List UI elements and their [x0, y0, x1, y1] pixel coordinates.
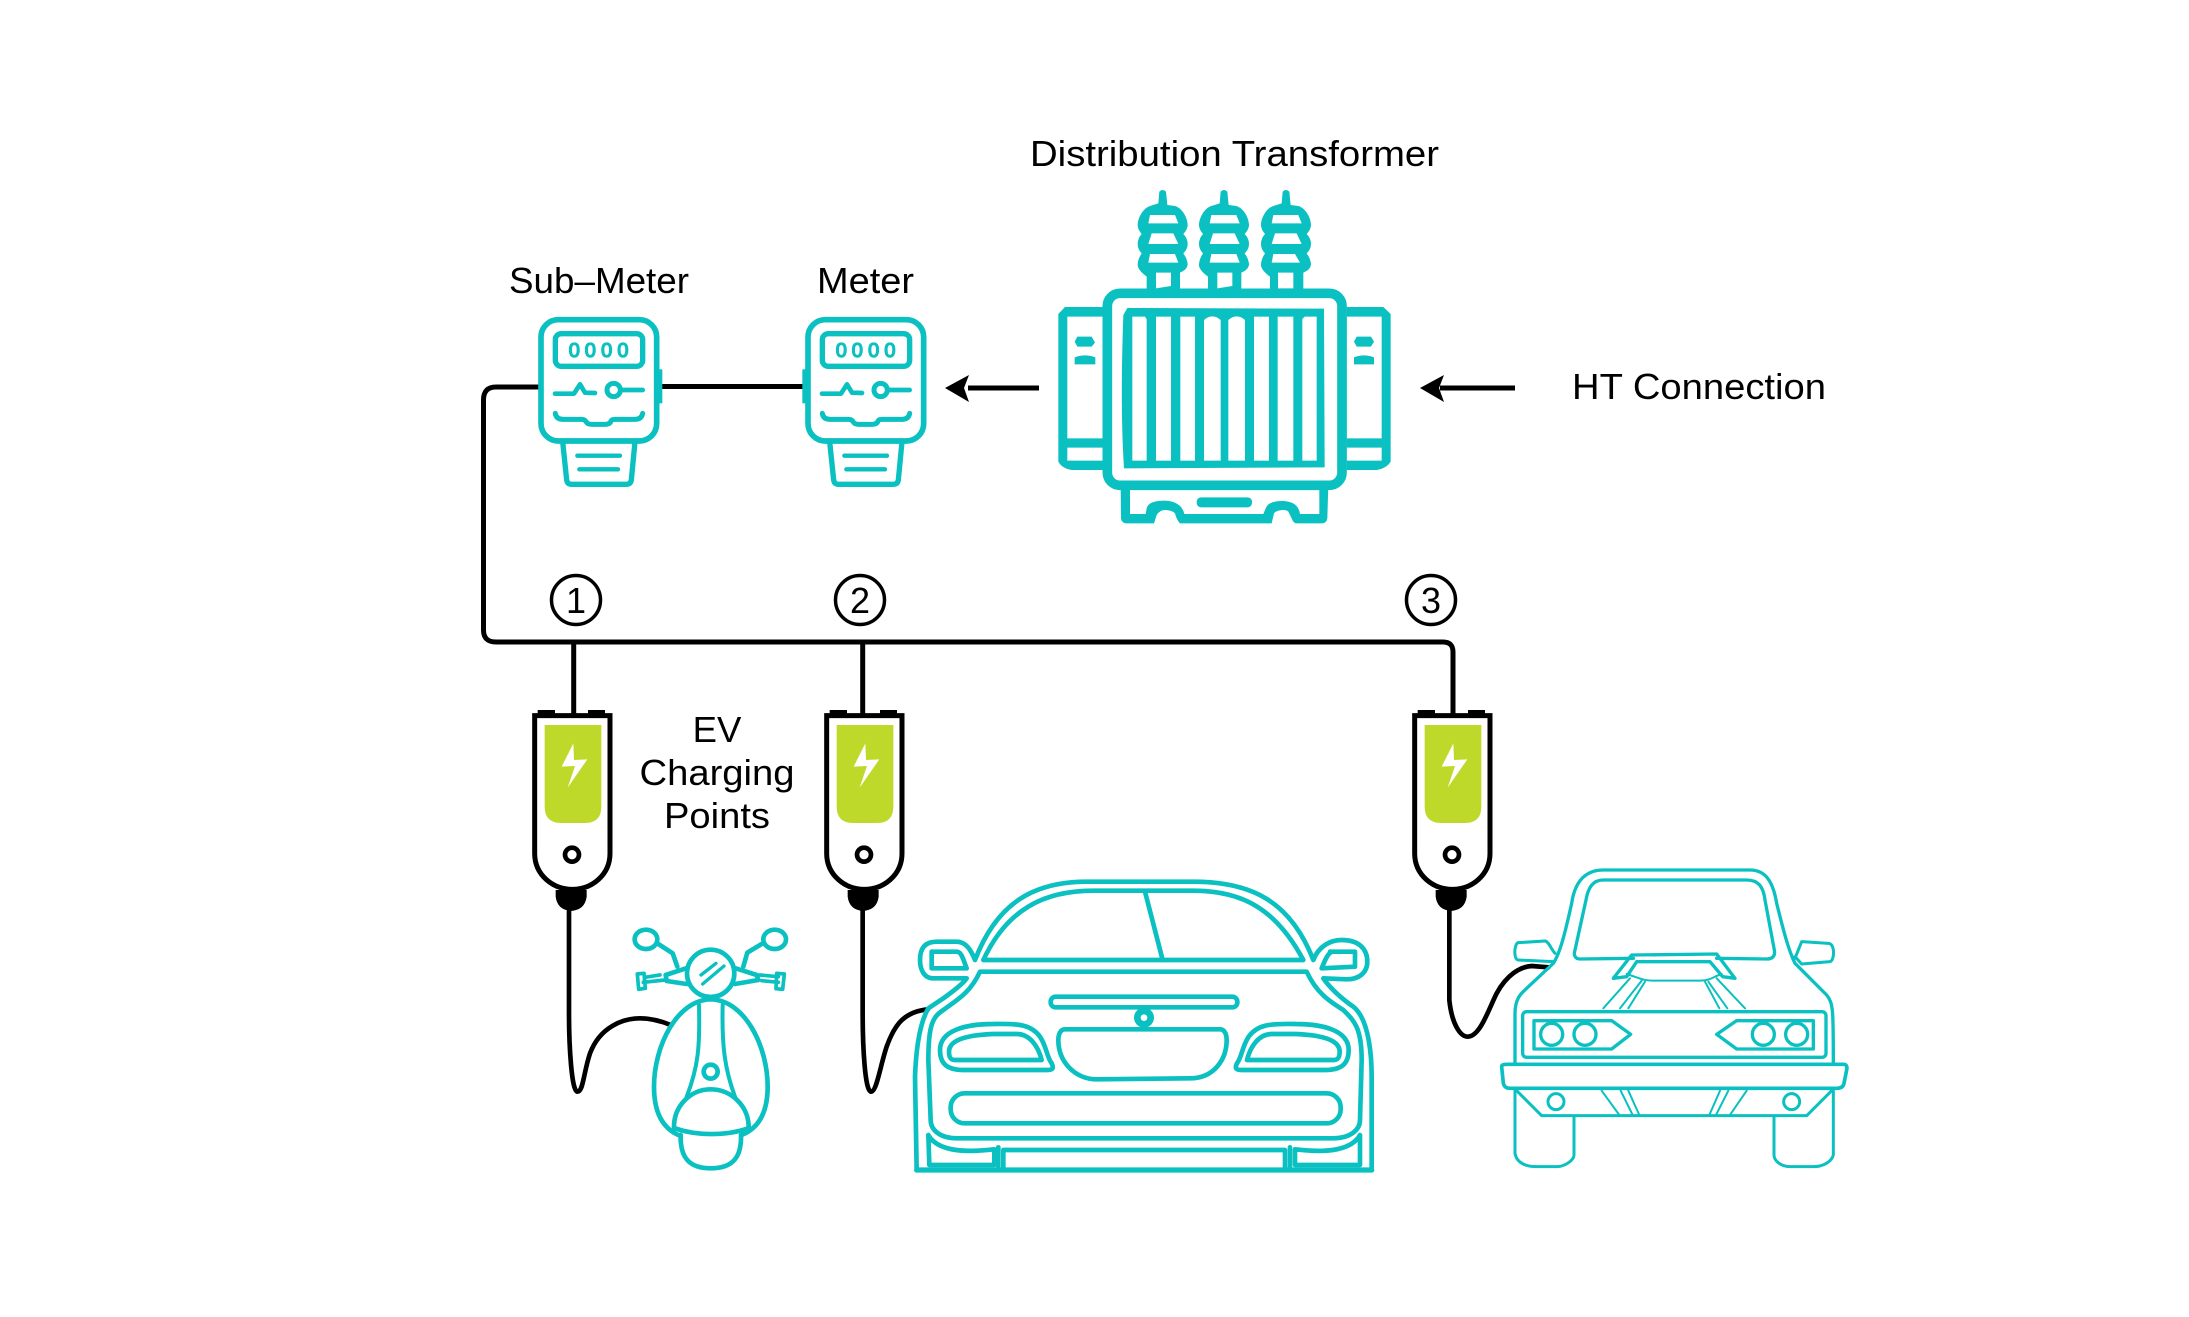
grille: [1058, 1029, 1227, 1079]
bumper: [1502, 1064, 1847, 1088]
wheels: [1515, 1090, 1574, 1167]
lightning bolt: [854, 743, 879, 788]
charging cable 2: [863, 911, 928, 1092]
windshield: [1574, 880, 1775, 959]
number badge 1: 1: [566, 580, 586, 621]
arrow: transformer to meter: [945, 375, 1039, 402]
icon: sedan car: [915, 882, 1372, 1170]
left headlight: [940, 1024, 1053, 1070]
icon: meter: [802, 320, 924, 484]
icon: distribution transformer: [1058, 190, 1391, 523]
windshield: [983, 891, 1303, 960]
car body outline: [915, 882, 1372, 1170]
charger 1: [535, 710, 610, 911]
battery level: [545, 725, 601, 823]
bottom trim: [928, 1135, 1360, 1165]
base: [1121, 485, 1328, 523]
mirrors: [1515, 941, 1555, 962]
rear light panel: [1523, 1012, 1826, 1057]
lightning bolt: [1442, 743, 1467, 788]
charging cable 3: [1449, 910, 1548, 1037]
right headlight: [1236, 1024, 1349, 1070]
heading: Distribution Transformer: Distribution Transformer: [1030, 133, 1439, 174]
heading: EV Charging Points: [640, 709, 794, 836]
charger 3: [1415, 710, 1490, 911]
heading: Meter: Meter: [817, 260, 914, 301]
battery level: [837, 725, 893, 823]
icon: sub-meter: [541, 320, 662, 484]
meter digits: 0000: [836, 340, 896, 362]
badge: [1137, 1011, 1151, 1024]
charger 2: [827, 710, 902, 911]
icon: muscle car: [1502, 870, 1847, 1167]
mirrors: [932, 952, 1355, 968]
battery level: [1425, 725, 1481, 823]
lightning bolt: [562, 743, 587, 788]
heading: EV Charging Points: EV: [693, 709, 742, 750]
meter digits: 0000: [569, 340, 629, 362]
cooling panel: [1122, 308, 1325, 468]
number badge 2: 2: [850, 580, 870, 621]
heading: HT Connection: HT Connection: [1572, 366, 1826, 407]
number badge 1: [552, 576, 600, 624]
hood stripes: [1603, 978, 1745, 1008]
heading: EV Charging Points: Charging: [640, 752, 794, 793]
number badge 3: 3: [1421, 580, 1441, 621]
lower valance: [1517, 1091, 1832, 1116]
icon: electric scooter: [635, 930, 786, 1168]
body outline: [1515, 870, 1833, 1063]
hood scoop: [1613, 954, 1735, 978]
heading: Sub-Meter: Sub–Meter: [509, 260, 689, 301]
arrow: HT connection to transformer: [1420, 375, 1515, 402]
hood and lower body: [928, 972, 1362, 1138]
lower intake: [951, 1093, 1341, 1123]
heading: EV Charging Points: Points: [664, 795, 770, 836]
insulators: [1138, 190, 1311, 290]
main tank: [1107, 293, 1342, 485]
charging cable 1: [569, 911, 671, 1092]
wiring: main power line from sub-meter to charging points: [484, 387, 1453, 714]
right fin: [1347, 307, 1391, 470]
trim bar: [1051, 997, 1237, 1007]
wiring: meter to sub-meter link: [660, 384, 805, 389]
number badge 3: [1406, 576, 1456, 624]
left fin: [1058, 307, 1103, 470]
number badge 2: [836, 576, 884, 624]
